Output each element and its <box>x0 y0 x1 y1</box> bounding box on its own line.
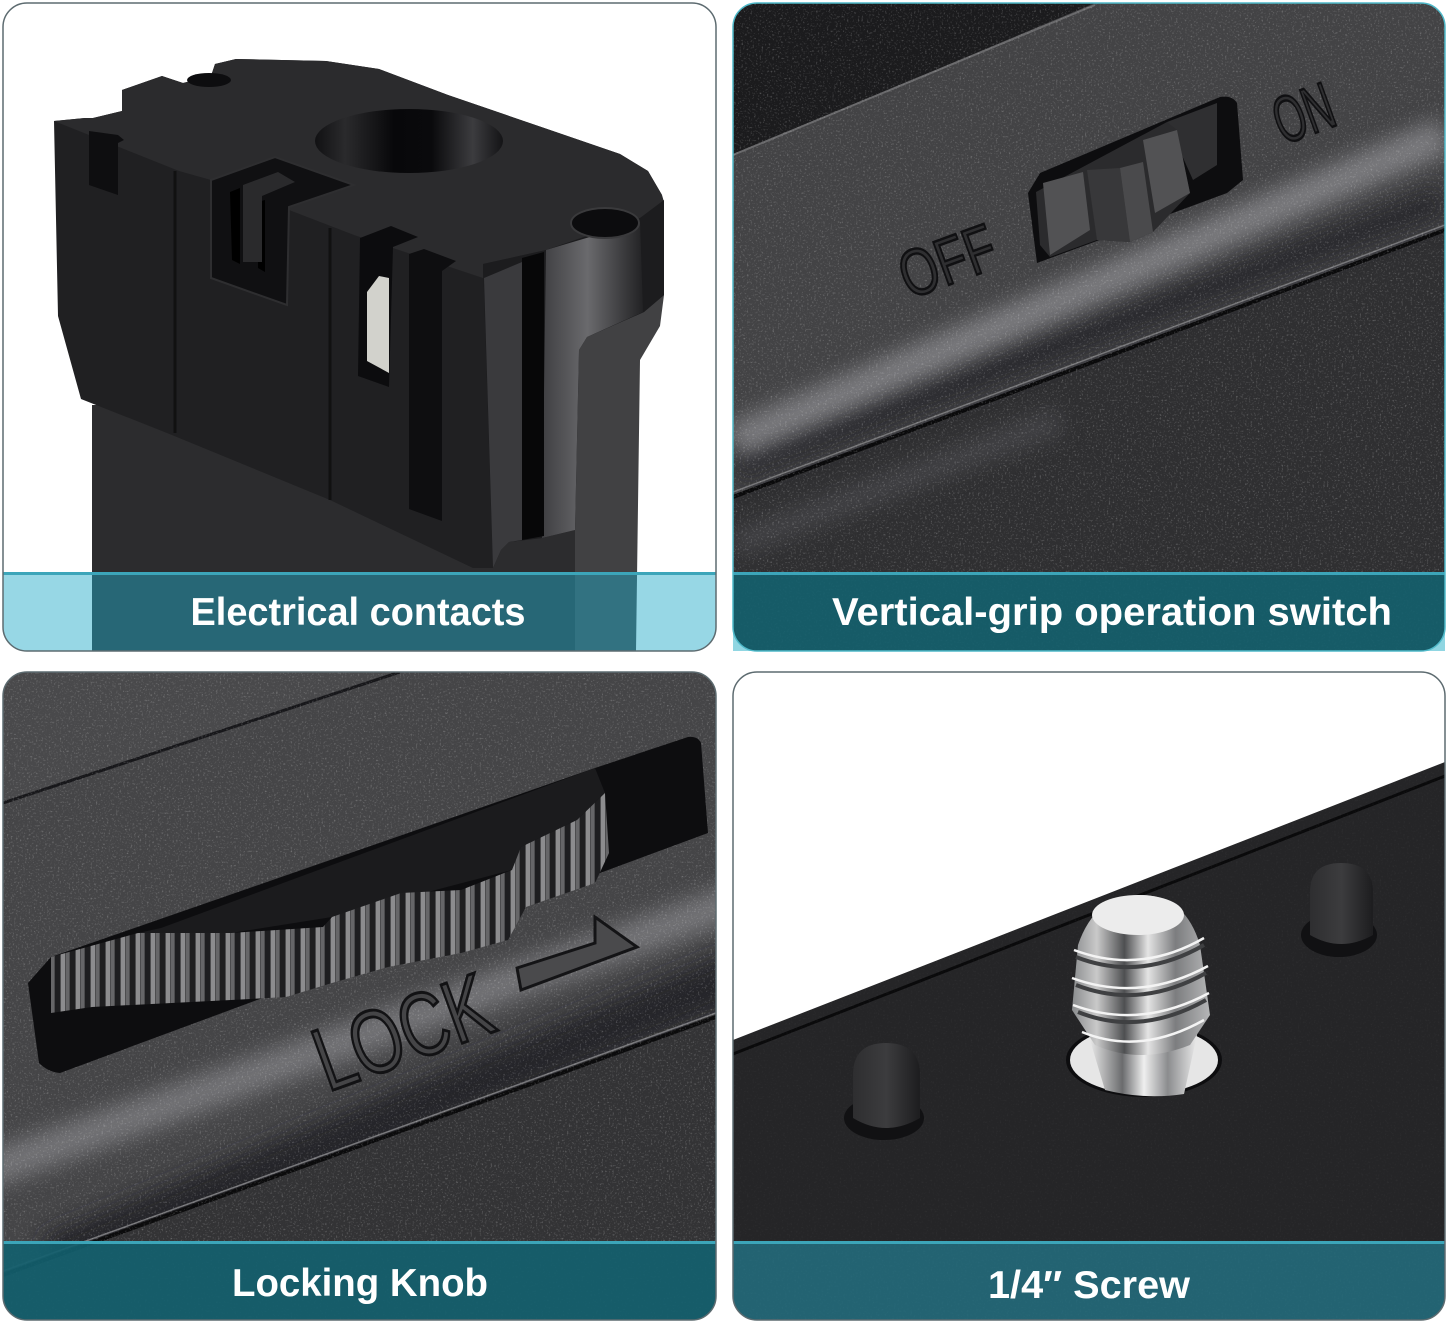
mounting screw <box>571 208 639 238</box>
lower section <box>734 234 1444 572</box>
glossy side <box>604 200 664 330</box>
grip body <box>92 405 575 650</box>
label: OFF: OFF <box>889 209 1006 312</box>
screw hole <box>315 109 503 173</box>
caption band <box>3 1241 716 1320</box>
caption band <box>733 1241 1445 1320</box>
caption: 1/4″ Screw <box>988 1264 1191 1307</box>
switch slot <box>1028 97 1243 263</box>
panel: electrical contacts <box>3 3 716 651</box>
knob <box>40 768 620 1020</box>
icon: lock arrow <box>517 917 637 990</box>
panel border <box>3 3 716 651</box>
caption band <box>3 572 716 651</box>
panel: vertical-grip operation switch <box>733 3 1445 651</box>
label: ON: ON <box>1262 68 1344 158</box>
caption: Vertical-grip operation switch <box>832 591 1392 634</box>
switch knob <box>1036 103 1217 257</box>
top face <box>54 59 664 278</box>
caption band <box>733 572 1445 651</box>
panel border <box>733 672 1445 1320</box>
knob slot <box>28 737 708 1073</box>
caption: Electrical contacts <box>190 591 526 634</box>
contact block <box>54 59 664 568</box>
caption: Locking Knob <box>232 1262 488 1305</box>
panel: 1/4 inch screw <box>734 762 1444 1320</box>
ridge shading <box>733 200 1445 468</box>
contact slots <box>89 131 456 521</box>
ridge shading <box>0 900 740 1173</box>
icon: screw <box>1066 895 1222 1097</box>
icon: left rubber nub <box>844 1043 924 1140</box>
panel border <box>733 3 1445 651</box>
base plate <box>733 762 1445 1320</box>
panel: locking knob <box>0 672 740 1320</box>
label: LOCK: LOCK <box>300 955 506 1111</box>
icon: right rubber nub <box>1301 863 1377 957</box>
panel border <box>3 672 716 1320</box>
panel corner backing <box>733 600 1445 651</box>
dark top corner <box>733 3 1095 155</box>
